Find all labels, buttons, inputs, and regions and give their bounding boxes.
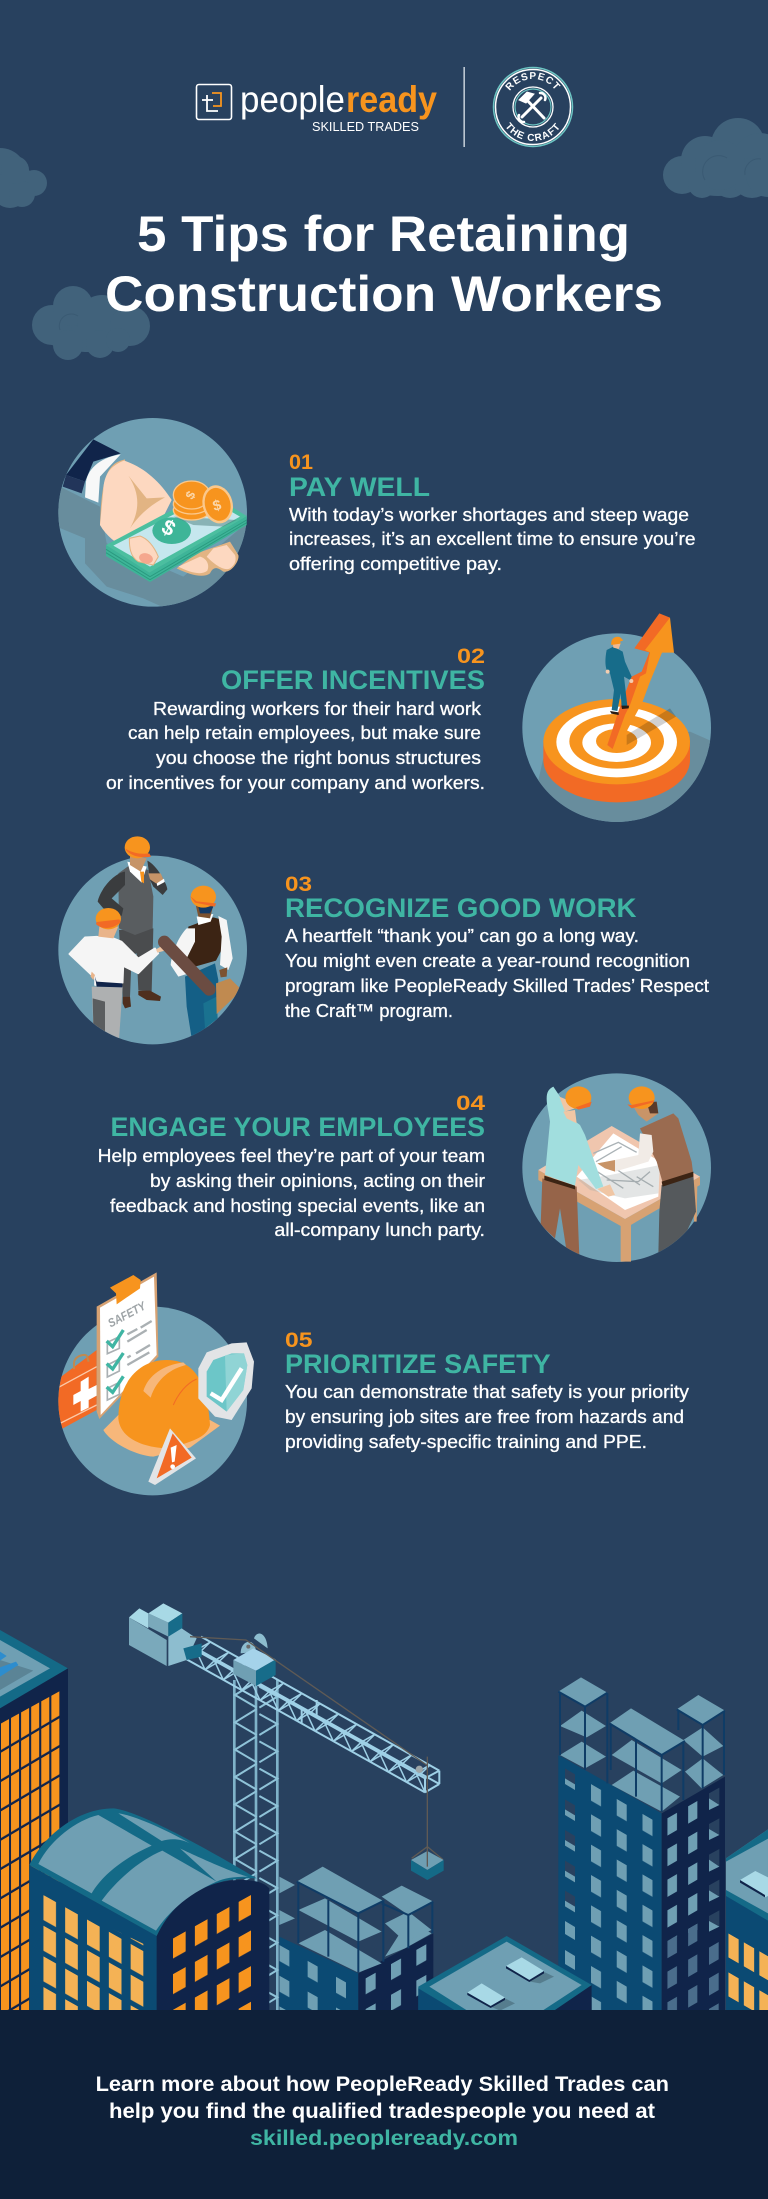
sub wordmark: SKILLED TRADES: [312, 119, 419, 134]
heading: PRIORITIZE SAFETY: [285, 1349, 551, 1379]
body text: offering competitive pay.: [289, 553, 502, 574]
pulley: [416, 1766, 423, 1773]
number: 05: [285, 1329, 313, 1352]
icon: hand holding money and coins: $: [158, 514, 180, 541]
body text: You can demonstrate that safety is your priority: [285, 1381, 690, 1402]
illustration: city skyline with crane: [0, 1603, 768, 2013]
icon: three construction workers talking: [58, 836, 247, 1044]
panel: tip 04 engage your employees: [98, 1073, 711, 1262]
title: Construction Workers: [105, 266, 663, 322]
wordmark: ready: [346, 79, 437, 120]
icon: hand holding money and coins: [57, 418, 250, 607]
badge: Respect the Craft: THE CRAFT: [506, 122, 559, 141]
cloud: beside title: [32, 286, 150, 360]
heading: PAY WELL: [289, 472, 430, 502]
number: 04: [456, 1092, 485, 1115]
crane: [129, 1603, 439, 2013]
building: arched roof: [29, 1808, 269, 2013]
icon: hand holding money and coins: $: [211, 497, 223, 515]
badge: Respect the Craft: RESPECT: [505, 72, 561, 90]
crane boom: [187, 1637, 439, 1792]
body text: Rewarding workers for their hard work: [153, 698, 482, 719]
call to action text: Learn more about how PeopleReady Skilled Trades can: [96, 2073, 669, 2096]
footer band: help you find the qualified tradespeople you need at: [109, 2100, 655, 2123]
header logos: [196, 66, 574, 148]
crane cable: [190, 1637, 427, 1765]
body text: by ensuring job sites are free from hazards and: [285, 1406, 684, 1427]
heading: ENGAGE YOUR EMPLOYEES: [110, 1112, 485, 1142]
crane hook and load: [411, 1757, 444, 1880]
body text: [285, 1381, 690, 1452]
icon: two workers reviewing blueprint: [522, 1073, 711, 1262]
body text: can help retain employees, but make sure: [128, 722, 481, 743]
crane counterweight: [129, 1603, 202, 1666]
logo mark: [196, 84, 232, 120]
body text: A heartfelt “thank you” can go a long way.: [285, 925, 639, 946]
body text: [289, 504, 696, 574]
body text: [285, 925, 709, 1021]
heading: OFFER INCENTIVES: [221, 665, 485, 695]
body text: You might even create a year-round recognition: [285, 950, 690, 971]
building: low rooftop: [418, 1936, 592, 2013]
panel: tip 01 pay well: [57, 418, 695, 607]
number: 03: [285, 873, 312, 896]
building: right block: [726, 1829, 768, 2013]
body text: [98, 1145, 485, 1240]
rooftop vents: [467, 1957, 554, 2011]
crane mast: [234, 1680, 277, 2013]
panel: tip 03 recognize good work: [58, 836, 709, 1044]
body text: by asking their opinions, acting on their: [150, 1170, 485, 1191]
icon: target with arrow and worker: [522, 613, 717, 832]
body text: Help employees feel they’re part of your team: [98, 1145, 485, 1166]
website link: skilled.peopleready.com: [250, 2127, 518, 2150]
icon: safety checklist, helmet, shield and warning: [57, 1272, 254, 1495]
icon: hammer and wrench: [519, 92, 545, 122]
badge: Respect the Craft: [492, 66, 574, 148]
panel: tip 02 offer incentives: [106, 613, 717, 832]
number: 01: [289, 451, 313, 474]
body text: With today’s worker shortages and steep wage: [289, 504, 689, 525]
body text: the Craft™ program.: [285, 1000, 453, 1021]
body text: all-company lunch party.: [274, 1219, 485, 1240]
body text: [106, 698, 485, 793]
icon: safety checklist, helmet, shield and warning: SAFETY: [106, 1298, 149, 1330]
title: 5 Tips for Retaining: [137, 206, 630, 262]
heading: RECOGNIZE GOOD WORK: [285, 893, 637, 923]
body text: providing safety-specific training and PPE.: [285, 1431, 647, 1452]
title: [105, 206, 663, 322]
body text: increases, it’s an excellent time to ensure you’re: [289, 528, 696, 549]
icon: hand holding money and coins: $: [183, 489, 199, 502]
wordmark: people: [240, 79, 345, 120]
logo: PeopleReady Skilled Trades: [196, 79, 437, 134]
cloud: top right: [663, 118, 768, 198]
body text: program like PeopleReady Skilled Trades’ Respect: [285, 975, 709, 996]
building: left tower: [0, 1630, 68, 2013]
number: 02: [457, 645, 485, 668]
building: tall tower: [411, 1677, 725, 2013]
building: construction block: [279, 1867, 433, 2013]
crane cab: [233, 1633, 276, 1686]
body text: you choose the right bonus structures: [156, 747, 481, 768]
body text: feedback and hosting special events, like an: [110, 1195, 485, 1216]
panel: tip 05 prioritize safety: [57, 1272, 690, 1495]
footer band: [0, 2010, 768, 2199]
body text: or incentives for your company and workers.: [106, 772, 485, 793]
cloud: top left: [0, 148, 47, 208]
